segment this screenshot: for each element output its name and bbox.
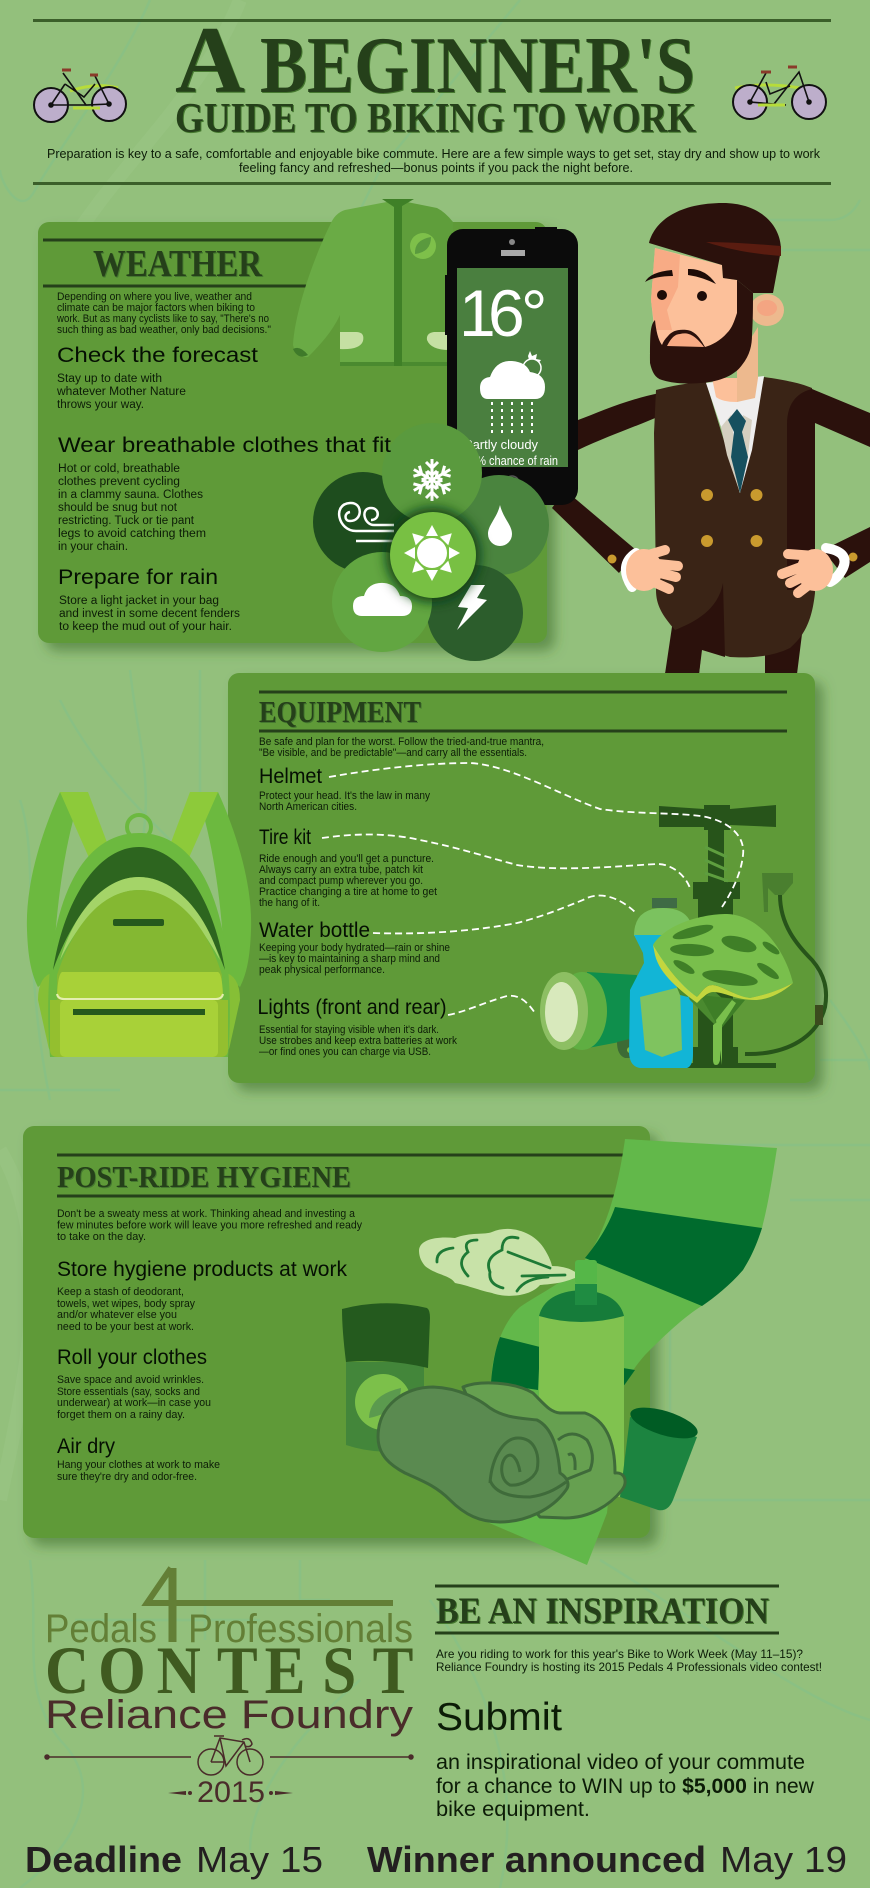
- text: submit details: bike equipment.: [436, 1798, 590, 1821]
- petal: cloud: [332, 552, 432, 652]
- header title block: [33, 7, 831, 185]
- intro text: feeling fancy and refreshed—bonus points if you pack the night before.: [239, 160, 633, 175]
- icon: jacket: [293, 199, 453, 366]
- text: breathable clothes body: [58, 463, 206, 553]
- text: lights: —or find ones you can charge via USB.: [259, 1046, 431, 1058]
- text: store hygiene products: Store hygiene products at work: [57, 1258, 347, 1281]
- icon: right bicycle: [733, 67, 826, 119]
- text: deadline: [25, 1839, 323, 1880]
- text: helmet: Protect your head. It's the law in many: [259, 790, 430, 802]
- man: pants: [665, 610, 805, 674]
- text: weather intro: [56, 291, 271, 336]
- text: check the forecast: Check the forecast: [57, 344, 258, 367]
- icon: left bicycle: [34, 70, 126, 122]
- heading: post-ride hygiene: POST-RIDE HYGIENE: [57, 1159, 351, 1194]
- icon: partly cloudy rain: [480, 351, 545, 434]
- panel: be an inspiration: [435, 1584, 822, 1821]
- text: lights: Lights (front and rear): [258, 996, 446, 1019]
- man: jacket: [654, 377, 815, 657]
- text: tire kit: Always carry an extra tube, patch kit: [259, 864, 423, 876]
- man: back arm left: [552, 393, 662, 573]
- text: water bottle: —is key to maintaining a sharp mind and: [259, 953, 440, 965]
- text: winner announced: Winner announced: [367, 1839, 706, 1880]
- text: breathable clothes body: should be snug but not: [58, 502, 178, 514]
- man: mouth: [667, 333, 704, 347]
- logo: pedals professionals: Professionals: [188, 1607, 413, 1651]
- petal: sun: [386, 508, 480, 602]
- icon: phone: [445, 227, 578, 505]
- icon group: weather flower: [313, 423, 549, 661]
- text: tire kit: the hang of it.: [259, 897, 320, 909]
- text: submit details: [436, 1751, 815, 1821]
- petal: snow: [382, 423, 482, 523]
- text: store hygiene products: towels, wet wipes, body spray: [57, 1298, 195, 1310]
- illustration: flashlight: [540, 972, 637, 1058]
- text: tire kit: Tire kit: [259, 826, 311, 849]
- intro text: [47, 146, 820, 175]
- text: weather intro: climate can be major factors when biking to: [57, 302, 255, 314]
- logo: reliance foundry: Reliance Foundry: [45, 1693, 413, 1737]
- man: buttons: [608, 489, 858, 564]
- phone: forecast text: [464, 438, 558, 468]
- text: equipment intro: Be safe and plan for the worst. Follow the tried-and-true mantra,: [259, 736, 544, 748]
- logo: contest: CONTEST: [45, 1632, 413, 1708]
- text: lights: Essential for staying visible when it's dark.: [259, 1024, 439, 1036]
- text: water bottle: Water bottle: [259, 919, 370, 942]
- logo: numeral 4: [147, 1568, 393, 1642]
- man: neck: [712, 378, 737, 402]
- man: jacket shadow: [665, 583, 725, 674]
- logo: divider and bicycle: [45, 1736, 413, 1775]
- title: A Beginner's: BEGINNER'S: [260, 22, 695, 110]
- text: winner announced: [367, 1839, 847, 1880]
- phone: temperature: 16°: [459, 276, 547, 350]
- text: water bottle: Keeping your body hydrated—rain or shine: [259, 942, 450, 954]
- man: right arm: [787, 389, 870, 590]
- petal: wind: [313, 472, 413, 572]
- text: weather intro: work. But as many cyclists like to say, "There's no: [56, 313, 269, 325]
- text: submit details: an inspirational video of your commute: [436, 1751, 805, 1774]
- text: weather intro: such thing as bad weather, only bad decisions.": [57, 324, 271, 336]
- illustration: spray can: [539, 1260, 624, 1497]
- text: store hygiene products: and/or whatever else you: [57, 1309, 177, 1321]
- text: prepare for rain: Prepare for rain: [58, 566, 218, 589]
- logo: year 2015: [168, 1776, 293, 1809]
- text: hygiene intro: [57, 1208, 362, 1243]
- text: roll your clothes: Roll your clothes: [57, 1346, 207, 1369]
- text: roll your clothes: Save space and avoid wrinkles.: [57, 1374, 204, 1386]
- illustration: scarf: [487, 1139, 777, 1565]
- text: equipment intro: [259, 736, 544, 759]
- text: deadline: May 15: [196, 1839, 323, 1880]
- text: check the forecast: throws your way.: [57, 399, 144, 411]
- heading: weather: WEATHER: [93, 243, 262, 285]
- text: breathable clothes body: in your chain.: [58, 541, 128, 553]
- illustration: spray mist: [419, 1229, 575, 1296]
- text: roll your clothes: underwear) at work—in case you: [57, 1397, 211, 1409]
- logo: Pedals 4 Professionals contest: [45, 1568, 413, 1809]
- logo: pedals professionals: [45, 1607, 413, 1651]
- text: submit: Submit: [436, 1696, 562, 1739]
- man: face: [651, 248, 737, 352]
- text: deadline: Deadline: [25, 1839, 182, 1880]
- text: tire kit: Ride enough and you'll get a puncture.: [259, 853, 434, 865]
- logo: pedals professionals: Pedals: [45, 1607, 157, 1651]
- illustration: cup: [620, 1401, 701, 1510]
- man: ear: [750, 294, 784, 326]
- text: winner announced: May 19: [720, 1839, 847, 1880]
- petal: rain drop: [449, 475, 549, 575]
- petal: lightning: [427, 565, 523, 661]
- text: check the forecast: Stay up to date with: [57, 373, 162, 385]
- text: lights: [258, 996, 457, 1058]
- heading: equipment: EQUIPMENT: [259, 694, 421, 729]
- text: breathable clothes body: restricting. Tuck or tie pant: [58, 515, 195, 527]
- text: contest intro: [436, 1647, 822, 1674]
- text: check the forecast: [56, 344, 258, 411]
- illustration: floor pump: [659, 805, 826, 1068]
- text: roll your clothes: Store essentials (say, socks and: [57, 1386, 200, 1398]
- text: hygiene intro: to take on the day.: [57, 1231, 146, 1243]
- man: eyes and brows: [645, 269, 716, 301]
- phone: forecast text: Partly cloudy: [464, 438, 539, 452]
- text: air dry: sure they're dry and odor-free.: [57, 1471, 197, 1483]
- text: helmet: Helmet: [259, 765, 322, 788]
- man: hair highlight: [706, 242, 781, 256]
- illustration: rolled towels: [378, 1383, 625, 1522]
- man: shirt: [706, 376, 764, 493]
- text: submit details: for a chance to WIN up to $5,000 in new: [436, 1775, 815, 1798]
- illustration: backpack: [27, 792, 251, 1057]
- text: roll your clothes: [57, 1346, 211, 1421]
- man: beard: [650, 280, 753, 384]
- text: tire kit: Practice changing a tire at home to get: [259, 886, 437, 898]
- dashed arrows: equipment callouts: [322, 763, 743, 1015]
- text: store hygiene products: Keep a stash of deodorant,: [57, 1286, 184, 1298]
- man: cuffs: [626, 548, 845, 587]
- text: weather intro: Depending on where you live, weather and: [57, 291, 252, 303]
- text: air dry: [57, 1435, 220, 1483]
- text: store hygiene products: need to be your best at work.: [57, 1321, 194, 1333]
- subtitle: guide to biking to work: GUIDE TO BIKING TO WORK: [175, 96, 696, 142]
- text: hygiene intro: Don't be a sweaty mess at work. Thinking ahead and investing a: [57, 1208, 356, 1220]
- text: hygiene intro: few minutes before work will leave you more refreshed and ready: [57, 1220, 362, 1232]
- text: equipment intro: "Be visible, and be predictable"—and carry all the essentials.: [259, 747, 527, 759]
- heading: be an inspiration: BE AN INSPIRATION: [436, 1591, 769, 1632]
- text: tire kit: and compact pump wherever you go.: [259, 875, 423, 887]
- text: prepare for rain: [58, 566, 240, 633]
- text: contest intro: Are you riding to work for this year's Bike to Work Week (May 11–15)?: [436, 1647, 803, 1661]
- text: lights: Use strobes and keep extra batteries at work: [259, 1035, 457, 1047]
- text: breathable clothes body: clothes prevent cycling: [58, 476, 180, 488]
- text: breathable clothes body: Hot or cold, breathable: [58, 463, 180, 475]
- illustration: water bottle: [629, 898, 693, 1068]
- text: helmet: North American cities.: [259, 801, 357, 813]
- panel: post-ride hygiene: [23, 1126, 650, 1538]
- logo: year 2015: 2015: [197, 1776, 265, 1809]
- text: water bottle: [259, 919, 450, 976]
- text: store hygiene products: [57, 1258, 347, 1333]
- text: prepare for rain: and invest in some decent fenders: [59, 608, 240, 620]
- man: hair: [649, 203, 781, 293]
- text: water bottle: peak physical performance.: [259, 964, 385, 976]
- illustration: bearded man: [552, 203, 870, 674]
- man: face shading: [651, 248, 680, 330]
- man: tie: [728, 409, 748, 493]
- intro text: Preparation is key to a safe, comfortable and enjoyable bike commute. Here are a few simple ways to get set, stay dry and show up to work: [47, 146, 820, 161]
- text: helmet: [259, 765, 430, 813]
- text: breathable clothes body: legs to avoid catching them: [58, 528, 206, 540]
- illustration: deodorant: [342, 1303, 430, 1452]
- text: air dry: Hang your clothes at work to make: [57, 1459, 220, 1471]
- text: prepare for rain: to keep the mud out of your hair.: [59, 621, 232, 633]
- text: roll your clothes: forget them on a rainy day.: [57, 1409, 185, 1421]
- panel: equipment: [228, 673, 815, 1083]
- text: tire kit: [259, 826, 437, 909]
- title: A Beginner's: A: [175, 7, 245, 113]
- man: right hand: [782, 554, 828, 593]
- phone: forecast text: 30% chance of rain: [464, 454, 558, 468]
- illustration: bike helmet: [653, 914, 793, 1065]
- text: check the forecast: whatever Mother Nature: [56, 386, 186, 398]
- text: air dry: Air dry: [57, 1435, 115, 1458]
- text: prepare for rain: Store a light jacket in your bag: [59, 595, 219, 607]
- man: left hand: [631, 550, 678, 589]
- text: breathable clothes body: in a clammy sauna. Clothes: [58, 489, 203, 501]
- text: contest intro: Reliance Foundry is hosting its 2015 Pedals 4 Professionals video contest!: [436, 1660, 822, 1674]
- panel: weather: [38, 222, 547, 643]
- heading: wear breathable clothes: Wear breathable clothes that fit: [58, 434, 391, 457]
- title: A Beginner's: [175, 7, 695, 113]
